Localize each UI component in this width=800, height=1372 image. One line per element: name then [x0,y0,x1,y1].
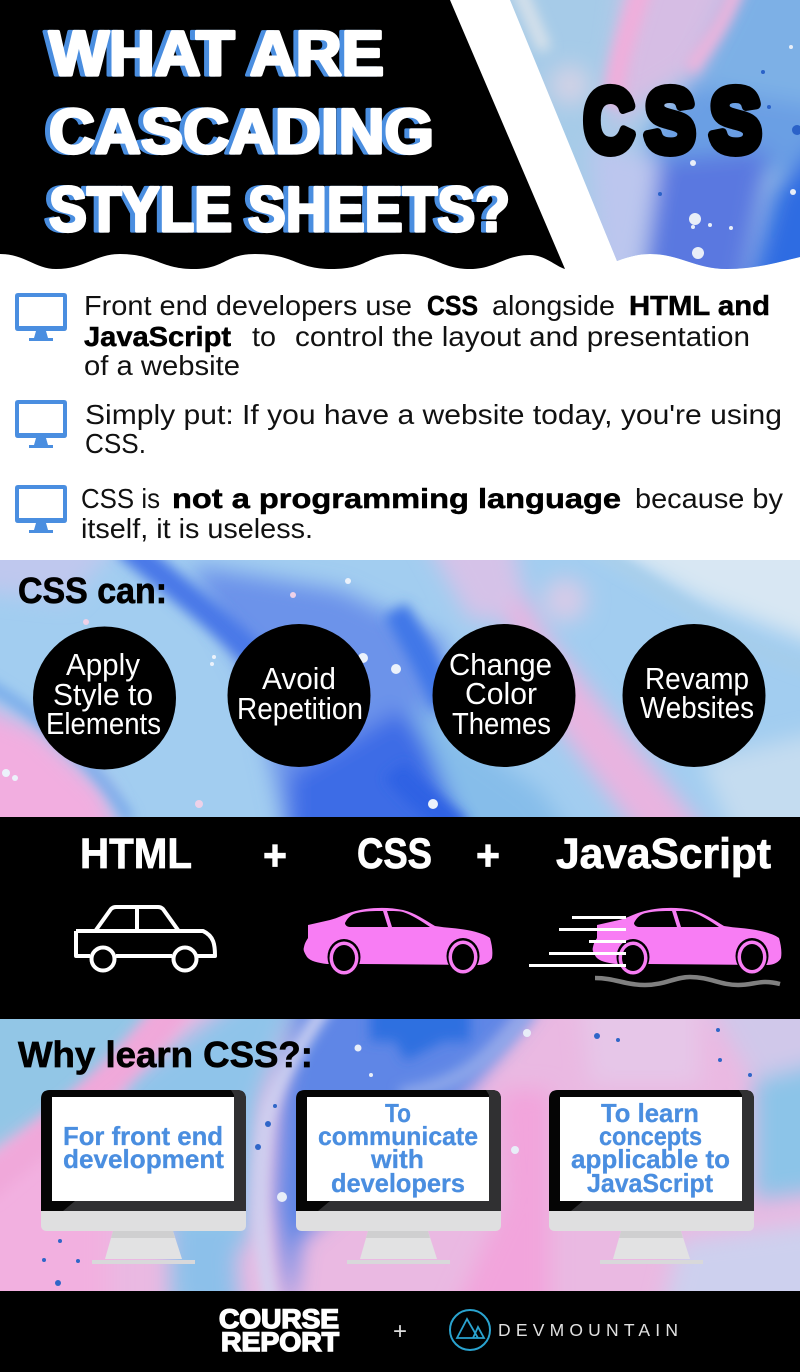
circle: avoid repetition [228,624,370,767]
circle: apply style to elements: Style to [53,677,153,712]
icon: monitor 1 [15,293,67,341]
title: What are Cascading Style Sheets? [44,19,510,245]
heading: JavaScript: JavaScript [556,830,771,878]
monitor: to learn concepts applicable to JavaScript: JavaScript [587,1168,713,1198]
text block: not a programming language: because by [635,483,783,514]
text block: not a programming language: itself, it is useless. [81,513,313,544]
text block: front end developers: of a website [84,350,240,381]
panel: CSS can marble background [0,560,800,817]
monitor: to learn concepts applicable to JavaScript: concepts [599,1121,702,1151]
title: What are Cascading Style Sheets?: WHAT ARE [49,19,384,89]
panel: HTML CSS JavaScript band [0,817,800,1019]
icon: monitor 3 [15,485,67,533]
circle: avoid repetition: Repetition [237,691,363,726]
plus sign 1: + [263,832,287,880]
footer band [0,1291,800,1372]
title: What are Cascading Style Sheets?: STYLE SHEETS? [44,175,505,245]
text block: simply put [15,399,782,459]
text block: front end developers [15,290,770,381]
text block: front end developers: Front end developers use [84,290,412,321]
logo: Course Report [219,1304,340,1357]
circle: change color themes: Color [465,676,537,711]
circle: change color themes: Themes [452,706,551,741]
circle: revamp websites: Websites [640,690,754,725]
monitor: for front end development [41,1090,246,1264]
monitor: for front end development: For front end [63,1121,223,1151]
heading: Why learn CSS: Why learn CSS?: [18,1034,313,1075]
circle: revamp websites: Revamp [645,661,749,696]
text block: simply put: CSS. [85,428,146,459]
title: What are Cascading Style Sheets?: WHAT ARE [44,19,379,89]
heading: CSS can: CSS can: [18,570,167,611]
icon: monitor 2 [15,400,67,448]
text block: not a programming language: not a programming language [172,483,621,514]
circle: apply style to elements: Apply [66,647,140,682]
heading: CSS: CSS [357,830,432,878]
title: What are Cascading Style Sheets?: CASCADING [49,97,434,167]
text block: not a programming language [15,483,783,544]
text block: front end developers: control the layout and presentation [295,321,750,352]
logo: DevMountain [450,1310,678,1350]
circle: apply style to elements [33,626,176,770]
header: black title panel [0,0,565,269]
icon: pink car [304,908,492,975]
monitor: to communicate with developers: To [385,1098,411,1128]
logo: Course Report: REPORT [221,1327,340,1357]
plus separator: + [393,1318,407,1345]
icon: fast pink car [529,908,781,985]
monitor: for front end development: development [63,1144,224,1174]
text block: front end developers: JavaScript [84,321,231,352]
heading: HTML: HTML [80,830,192,878]
logo: DevMountain: DEVMOUNTAIN [498,1320,678,1340]
circle: revamp websites [622,624,766,767]
monitor: to communicate with developers: with [370,1144,424,1174]
title: What are Cascading Style Sheets?: STYLE SHEETS? [49,175,510,245]
text block: simply put: Simply put: If you have a website today, you're using [85,399,782,430]
title: What are Cascading Style Sheets?: CASCADING [44,97,429,167]
text block: not a programming language: CSS is [81,483,160,514]
monitor: to communicate with developers: communicate [318,1121,478,1151]
header: marble panel [510,0,800,269]
heading: CSS: S [710,70,761,170]
monitor: to communicate with developers: developers [331,1168,465,1198]
circle: avoid repetition: Avoid [262,661,336,696]
monitor: to learn concepts applicable to JavaScript: applicable to [571,1144,730,1174]
monitor: to learn concepts applicable to JavaScript: To learn [601,1098,699,1128]
circle: change color themes: Change [449,647,552,682]
panel: why learn CSS marble background [0,1019,800,1291]
plus sign 2: + [476,832,500,880]
heading: CSS [584,70,761,170]
monitor: to learn concepts applicable to JavaScript [549,1090,754,1264]
text block: front end developers: CSS [427,290,478,321]
text block: front end developers: alongside [492,290,615,321]
icon: white outline car [76,907,215,970]
circle: change color themes [432,624,576,767]
monitor: to communicate with developers [296,1090,501,1264]
heading: CSS: S [645,70,695,170]
text block: front end developers: HTML and [629,290,770,321]
road line [595,977,780,985]
text block: front end developers: to [252,321,276,352]
circle: apply style to elements: Elements [46,706,161,741]
heading: CSS: C [584,70,634,170]
logo: Course Report: COURSE [219,1304,339,1334]
